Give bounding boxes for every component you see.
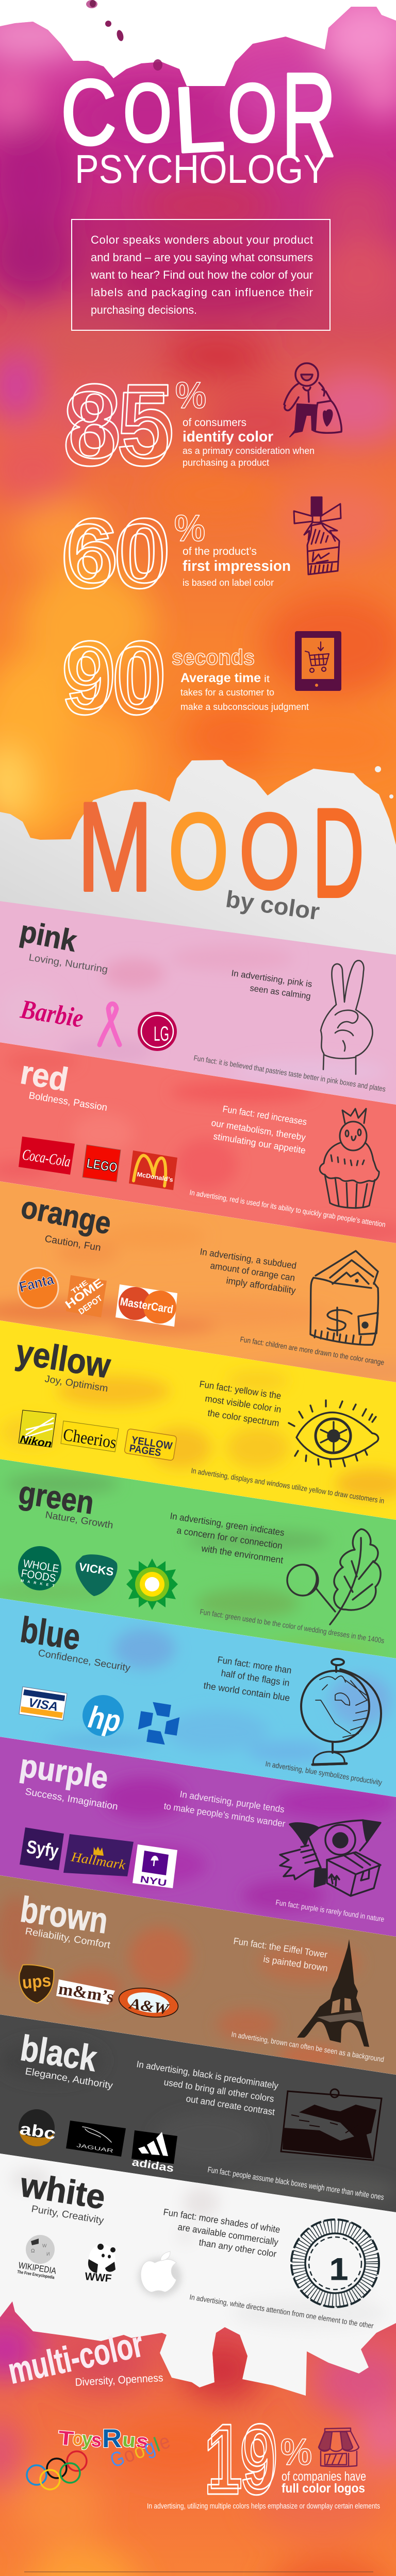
fun fact: is painted brown (262, 1954, 328, 1974)
ad fact: In advertising, purple tends (179, 1789, 285, 1815)
logo: Vicks: VICKS (78, 1560, 114, 1579)
fun fact (233, 1936, 328, 1974)
panel: green (0, 1459, 396, 1659)
logo: Barbie: Barbie (18, 994, 86, 1033)
background: mood paint area (0, 760, 396, 963)
stat: 90 seconds: 90 (61, 626, 162, 735)
logo: UPS: ups (21, 1971, 52, 1993)
traits: Reliability, Comfort (24, 1926, 111, 1951)
panel: pink (0, 901, 396, 1105)
stat: 90 seconds (61, 621, 309, 735)
logo: Coca-Cola: Coca-Cola (21, 1146, 72, 1171)
panel: blue (0, 1598, 396, 1797)
logo: Wikipedia: WIKIPEDIA (18, 2260, 57, 2276)
icon: wallet (310, 1251, 378, 1345)
traits: Loving, Nurturing (28, 952, 109, 975)
fun fact: Fun fact: the Eiffel Tower (233, 1936, 328, 1960)
fun fact: are available commercially (177, 2222, 279, 2247)
fun fact (203, 1654, 292, 1703)
logo: UPS (19, 1964, 54, 2003)
stat: 90 seconds: 90 (65, 621, 167, 729)
icon: eye (289, 1400, 378, 1467)
heading: MOOD: O (239, 792, 300, 911)
stat: 85 percent: as a primary consideration when (183, 446, 315, 456)
ad fact (199, 1246, 297, 1296)
title: COLOR: C (61, 61, 117, 164)
stat: 85 percent: purchasing a product (183, 457, 269, 468)
logo: Google: g (141, 2435, 158, 2460)
title: COLOR: O (228, 66, 277, 159)
logo: Cheerios: Cheerios (62, 1425, 118, 1452)
stat: 19 percent: 19 (207, 2405, 278, 2509)
panel: white (0, 2154, 396, 2421)
logo: ABC: abc (19, 2119, 57, 2143)
intro box: labels and packaging can influence their (91, 286, 313, 299)
logo: Olympic rings (27, 2451, 87, 2489)
fun fact (210, 1104, 307, 1156)
fun fact: Fun fact: red increases (222, 1104, 307, 1127)
heading: white: white (18, 2165, 108, 2216)
ad fact: with the environment (200, 1543, 284, 1566)
stat: 60 percent: is based on label color (183, 578, 274, 588)
divider (24, 2571, 373, 2572)
stat: 85 percent: identify color (183, 429, 273, 445)
stat: 60 percent: % (174, 508, 205, 549)
ad fact: imply affordability (225, 1275, 296, 1296)
icon: shopper with bag (284, 363, 341, 437)
stat: 90 seconds: it (264, 674, 270, 685)
logo: Toys R Us: s (90, 2429, 103, 2452)
heading: pink: pink (18, 914, 80, 958)
heading: orange: orange (19, 1190, 114, 1241)
logo: Jaguar: JAGUAR (76, 2143, 113, 2154)
logo: NYU (133, 1844, 177, 1888)
heading: black: black (18, 2028, 100, 2079)
logo: Adidas: adidas (131, 2156, 175, 2175)
icon: gift bottle (294, 497, 341, 574)
icon: storefront (319, 2428, 359, 2467)
title: PSYCHOLOGY: PSYCHOLOGY (75, 146, 327, 192)
logo: Wikipedia: Ω (31, 2248, 35, 2254)
ad fact: amount of orange can (209, 1260, 296, 1283)
traits: Joy, Optimism (44, 1374, 109, 1394)
logo: Apple (138, 2251, 182, 2297)
title: COLOR: L (171, 66, 227, 173)
logo: Google: o (130, 2439, 148, 2464)
logo: Nikon (19, 1410, 56, 1450)
stat: 90 seconds: make a subconscious judgment (180, 702, 309, 712)
subheading: by color: by color (224, 885, 321, 925)
logo: Vicks (75, 1554, 118, 1596)
logo: Whole Foods: MARKET (21, 1579, 55, 1588)
stat: 85 percent: of consumers (183, 417, 246, 429)
heading: red: red (18, 1054, 71, 1098)
logo: HP: hp (86, 1700, 123, 1739)
logo: Toys R Us: u (121, 2429, 137, 2452)
stat: 19 percent: of companies have (282, 2469, 366, 2484)
logo: MasterCard (116, 1284, 177, 1327)
ad fact: seen as calming (249, 983, 311, 1002)
logo: MasterCard: MasterCard (119, 1295, 174, 1316)
logo: Whole Foods: WHOLE (22, 1557, 60, 1575)
heading: MOOD (77, 776, 364, 923)
logo: Yellow Pages: PAGES (128, 1443, 162, 1459)
fun fact: Fun fact: more shades of white (162, 2207, 281, 2235)
ad fact (136, 2059, 279, 2117)
background: bottom watercolor wash (0, 2298, 396, 2576)
stat: 19 percent (204, 2405, 366, 2514)
logo: Wikipedia: The Free Encyclopedia (17, 2269, 55, 2280)
paint drops (375, 766, 393, 799)
logo: Nikon: Nikon (19, 1433, 53, 1450)
ad fact: to make people’s minds wander (163, 1801, 286, 1829)
logo: Toys R Us: R (102, 2424, 122, 2453)
stat: 60 percent: 60 (61, 505, 166, 607)
logo: Wikipedia: И (46, 2251, 50, 2257)
title: COLOR: R (282, 48, 336, 182)
ad fact (169, 1511, 285, 1566)
logo: Google: e (156, 2430, 173, 2454)
logo: Visa (19, 1687, 67, 1720)
heading: multi-color: multi-color (5, 2324, 146, 2392)
logo: Toys R Us: T (57, 2427, 75, 2450)
logo: LG (138, 1012, 177, 1051)
heading: yellow: yellow (13, 1332, 113, 1386)
logo: Wikipedia (17, 2235, 57, 2280)
panel: red (0, 1042, 396, 1243)
fun fact: our metabolism, thereby (210, 1117, 306, 1143)
heading: MOOD: O (169, 792, 228, 911)
stat: 60 percent: first impression (183, 558, 291, 574)
logo: Hallmark: Hallmark (70, 1849, 127, 1873)
stat: 85 percent: % (175, 375, 206, 416)
fun fact: most visible color in (204, 1393, 282, 1415)
logo: Chase (136, 1701, 182, 1746)
logo: Google: o (120, 2443, 138, 2467)
icon: peace hand (321, 960, 373, 1074)
stat: 19 percent: full color logos (282, 2481, 365, 2496)
traits: Caution, Fun (44, 1233, 102, 1253)
fun fact: Fun fact: more than (217, 1654, 292, 1675)
logo: Adidas (131, 2130, 177, 2175)
logo: Coca-Cola (19, 1137, 75, 1175)
stat: 85 percent (63, 362, 315, 488)
logo: LEGO (82, 1145, 121, 1182)
logo: NYU: NYU (139, 1874, 168, 1888)
traits: Purity, Creativity (30, 2204, 105, 2226)
stat: 85 percent: 85 (63, 370, 170, 488)
logo: M&M's: m&m’s (57, 1979, 115, 2006)
traits: Elegance, Authority (24, 2066, 114, 2091)
ad fact: In advertising, green indicates (169, 1511, 285, 1538)
traits: Confidence, Security (37, 1648, 131, 1674)
logo: Google: l (151, 2433, 163, 2456)
logo: ABC (19, 2109, 57, 2146)
stat: 60 percent (61, 499, 291, 607)
logo: Fanta: Fanta (18, 1271, 56, 1295)
logo: Wikipedia: W (42, 2243, 47, 2248)
panel: purple (0, 1737, 396, 1937)
ad fact: In advertising, black is predominately (136, 2059, 279, 2091)
logo: McDonald's: McDonald’s (137, 1171, 174, 1183)
icon: pinned landscape picture (281, 2089, 382, 2160)
logo: BP (126, 1558, 178, 1610)
traits: Boldness, Passion (28, 1090, 108, 1113)
icon: globe (301, 1659, 381, 1765)
stat: 90 seconds: Average time (180, 671, 261, 685)
logo: WWF: WWF (85, 2270, 112, 2285)
logo: Toys R Us: y (81, 2428, 93, 2451)
stat: 85 percent: 85 (68, 362, 174, 480)
logo: Google: G (107, 2446, 128, 2472)
logo: Syfy: Syfy (25, 1836, 60, 1862)
title: COLOR: O (123, 66, 172, 159)
logo: The Home Depot (63, 1275, 107, 1317)
traits: Success, Imagination (24, 1786, 119, 1812)
intro box: and brand – are you saying what consumers (91, 251, 313, 264)
intro box: want to hear? Find out how the color of your (90, 268, 313, 281)
heading: green: green (16, 1475, 96, 1521)
logo: Fanta (18, 1268, 58, 1308)
logo: LEGO: LEGO (86, 1155, 119, 1175)
icon: leaf and berry (287, 1529, 381, 1624)
logo: Toys R Us: s (135, 2430, 150, 2453)
fun fact: the color spectrum (207, 1408, 280, 1429)
logo: Whole Foods (18, 1546, 61, 1590)
fun fact: the world contain blue (203, 1680, 291, 1703)
heading: purple: purple (18, 1748, 110, 1796)
logo: Yellow Pages: YELLOW (130, 1434, 173, 1452)
ad fact (163, 1789, 286, 1829)
icon: cupcake (320, 1109, 379, 1208)
traits: multi-color: Diversity, Openness (75, 2372, 163, 2388)
title: COLOR (61, 48, 336, 182)
panel: yellow (0, 1320, 396, 1520)
logo: Jaguar (66, 2121, 126, 2157)
traits: Nature, Growth (44, 1510, 114, 1531)
ad fact: a concern for or connection (176, 1525, 283, 1551)
icon: rocket with box (280, 1820, 381, 1896)
heading: brown: brown (18, 1889, 110, 1941)
panel: brown (0, 1875, 396, 2075)
fun fact: than any other color (198, 2237, 277, 2259)
ad fact: In advertising, pink is (230, 968, 313, 989)
icon: number one badge: 1 (329, 2252, 348, 2286)
fun fact: Fun fact: yellow is the (199, 1379, 282, 1401)
fun fact: half of the flags in (220, 1668, 290, 1688)
fun fact: stimulating our appetite (212, 1131, 306, 1156)
ad fact: used to bring all other colors (163, 2077, 275, 2104)
fun fact (199, 1379, 282, 1429)
logo: Google (107, 2430, 173, 2472)
logo: Yellow Pages (124, 1429, 177, 1461)
stat: 90 seconds: seconds (172, 645, 255, 669)
stat: 60 percent: 60 (66, 499, 171, 602)
logo: pink ribbon (100, 1004, 120, 1045)
intro box: Color speaks wonders about your product (91, 233, 313, 246)
paint splatter dots (86, 0, 162, 71)
stat: 19 percent: 19 (204, 2411, 276, 2514)
logo: Whole Foods: FOODS (20, 1567, 57, 1585)
logo: LG: LG (154, 1023, 169, 1045)
logo: Syfy (20, 1827, 64, 1870)
stat: 90 seconds: takes for a customer to (180, 687, 274, 698)
logo: A&W (117, 1984, 180, 2021)
icon: Eiffel tower (297, 1939, 369, 2047)
icon: number one badge (291, 2219, 379, 2307)
logo: Toys R Us: o (72, 2428, 84, 2450)
panel: black (0, 2014, 396, 2212)
logo: The Home Depot: HOME (63, 1276, 106, 1311)
logo: McDonald's (129, 1150, 177, 1190)
logo: A&W: A&W (127, 1995, 171, 2018)
icon: tablet with cart (295, 631, 341, 691)
logo: The Home Depot: DEPOT (77, 1294, 104, 1316)
logo: Visa: VISA (27, 1696, 59, 1714)
fun fact (162, 2207, 281, 2259)
panel: orange (0, 1181, 396, 1382)
heading: MOOD: M (77, 776, 153, 917)
intro box: purchasing decisions. (91, 303, 197, 316)
logo: WWF (85, 2244, 116, 2285)
logo: Toys R Us (57, 2424, 150, 2453)
heading: blue: blue (18, 1609, 83, 1657)
intro box (72, 219, 330, 330)
ad fact: In advertising, a subdued (199, 1246, 297, 1271)
background: top watercolor wash (0, 0, 396, 907)
logo: Hallmark (63, 1834, 134, 1876)
stat: 19 percent: % (280, 2432, 312, 2473)
ad fact (230, 968, 313, 1002)
logo: The Home Depot: THE (70, 1278, 90, 1295)
ad fact: out and create contrast (185, 2093, 275, 2117)
stat: 60 percent: of the product’s (183, 546, 257, 557)
